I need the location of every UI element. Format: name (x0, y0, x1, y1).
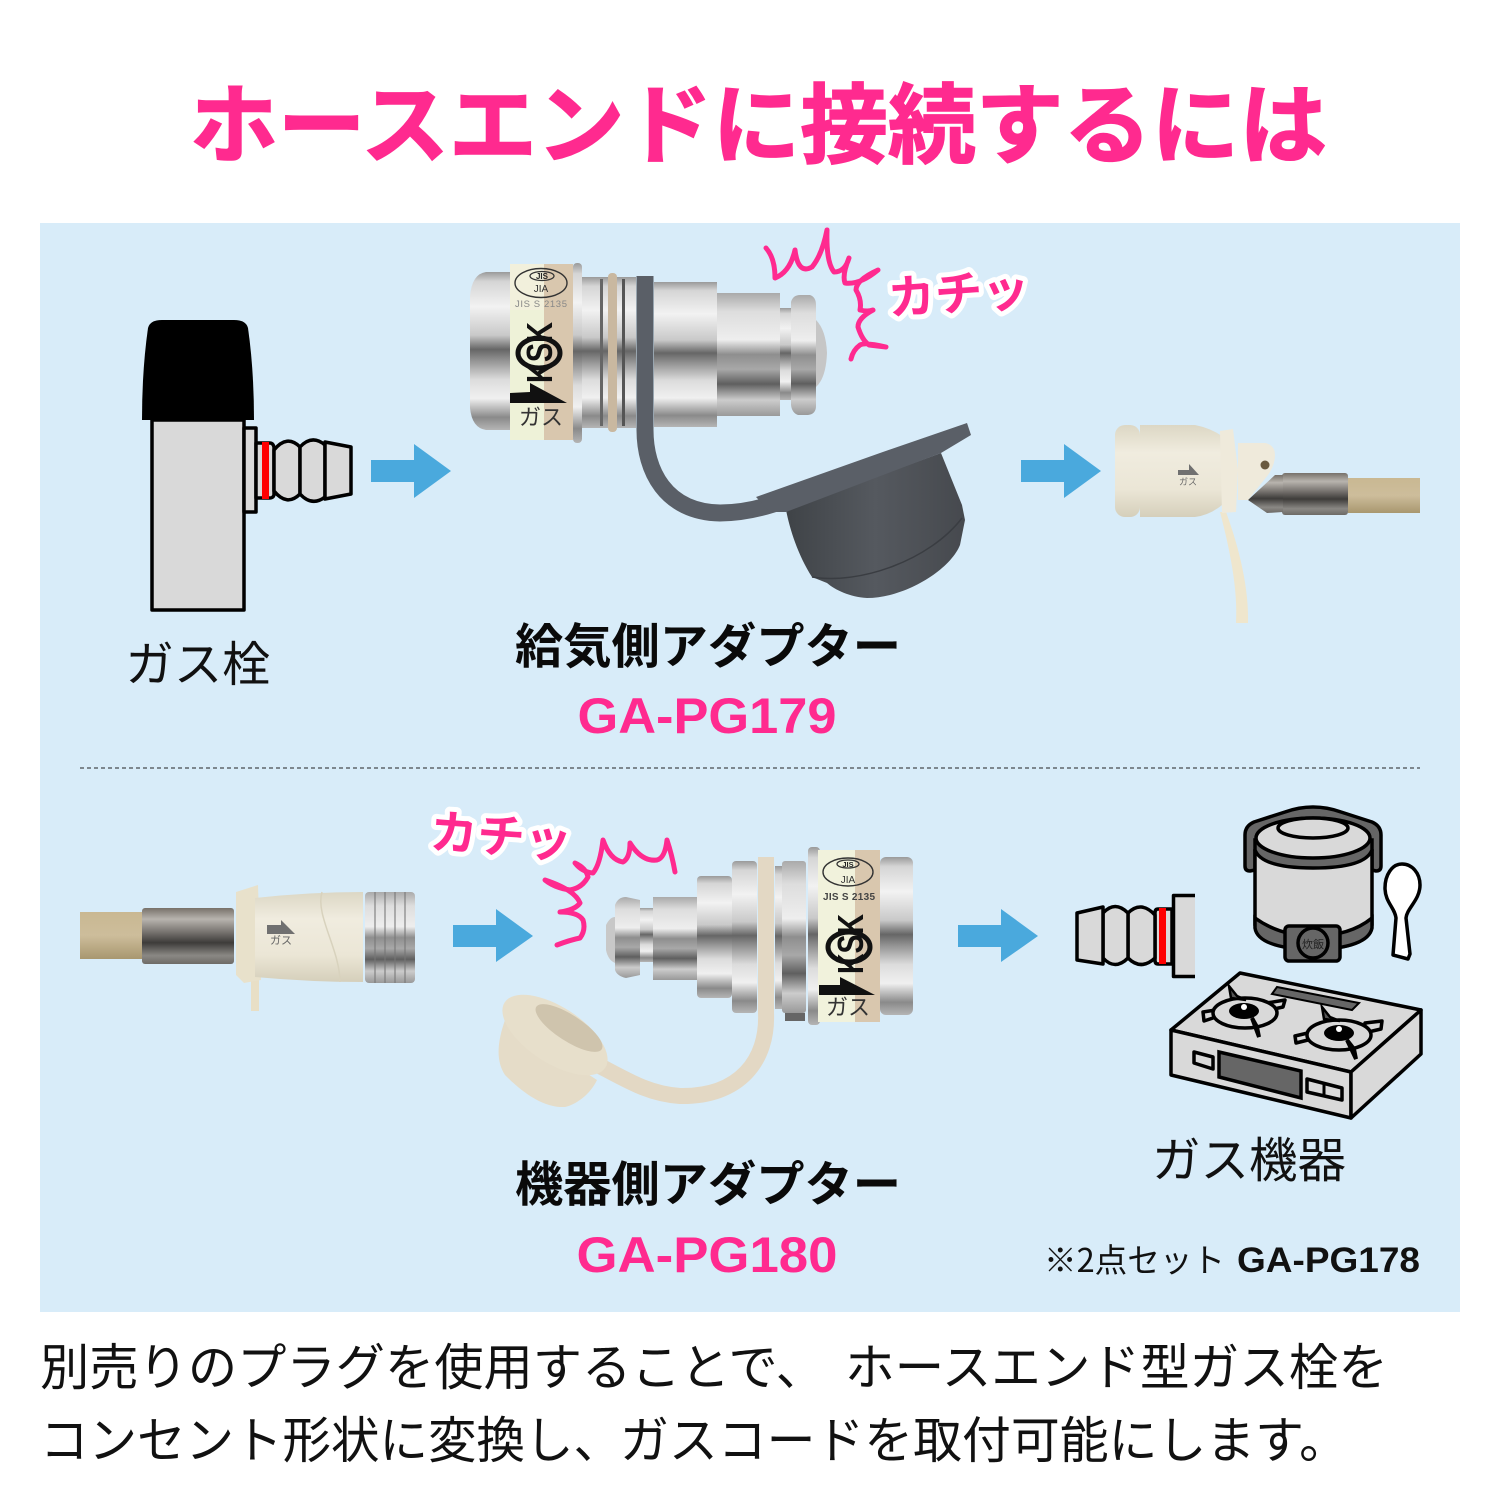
description text: ガスコードを取付可能にします。 (620, 1401, 1348, 1473)
gray cap and strap (645, 276, 971, 598)
photo: plug on cord, bottom row (80, 885, 415, 1011)
burner left (1203, 986, 1285, 1037)
KSK logo: ガス (826, 990, 870, 1022)
burst lines: click top (766, 230, 886, 359)
panel: connection steps (40, 223, 1460, 1312)
icon: gas stove (1171, 973, 1421, 1118)
beige cap and strap (489, 857, 766, 1107)
description text: コンセント形状に変換し、 (40, 1401, 622, 1473)
model number: GA-PG180: GA-PG180 (576, 1227, 838, 1283)
JIS mark: JIS S 2135 (823, 892, 875, 903)
icon: rice cooker (1245, 807, 1381, 961)
KSK logo: KSK (519, 322, 560, 383)
photo: appliance-side adapter (489, 847, 913, 1107)
photo: supply-side adapter (470, 263, 971, 598)
burst lines: click bottom (545, 840, 675, 945)
KSK logo: ガス (519, 400, 563, 432)
sound text bottom: カチッ (428, 793, 574, 872)
icon: rice cooker: 炊飯 (1302, 936, 1324, 952)
description text: 別売りのプラグを使用することで、 (40, 1328, 825, 1400)
arrow 2 (1021, 444, 1101, 498)
KSK logo (819, 914, 875, 1022)
arrow 4 (958, 909, 1038, 962)
KSK logo: KSK (830, 914, 871, 974)
burner right (1295, 1007, 1382, 1059)
photo: plug on cord, bottom row: ガス (270, 932, 292, 948)
label: supply-side adapter: 給気側アダプター (515, 607, 901, 677)
arrow 3 (453, 909, 533, 962)
JIS mark (515, 268, 567, 310)
icon: rice paddle (1385, 864, 1420, 959)
JIS mark: JIS S 2135 (515, 299, 567, 310)
model number: GA-PG179: GA-PG179 (578, 688, 836, 744)
note: two-piece set (1044, 1234, 1420, 1282)
photo: gas cord with plug: ガス (1179, 475, 1197, 488)
JIS mark: JIS (842, 860, 854, 869)
icon: hose end fitting (1077, 896, 1195, 976)
note: two-piece set: GA-PG178 (1237, 1241, 1420, 1280)
JIS mark: JIA (841, 875, 856, 886)
description text: ホースエンド型ガス栓を (845, 1328, 1388, 1400)
title: ホースエンドに接続するには (190, 56, 1327, 182)
JIS mark (823, 858, 875, 903)
description text (40, 1328, 1388, 1473)
sound text top: カチッ (885, 250, 1032, 329)
icon: gas valve (142, 320, 351, 610)
JIS mark: JIA (534, 284, 549, 295)
KSK logo (510, 322, 567, 432)
label: gas valve: ガス栓 (126, 625, 270, 695)
arrow 1 (371, 444, 451, 498)
photo: gas cord with plug (1115, 425, 1420, 623)
label: gas appliances: ガス機器 (1152, 1121, 1346, 1191)
JIS mark: JIS (536, 272, 549, 281)
note: two-piece set: ※2点セット (1044, 1234, 1225, 1282)
label: appliance-side adapter: 機器側アダプター (515, 1145, 901, 1215)
